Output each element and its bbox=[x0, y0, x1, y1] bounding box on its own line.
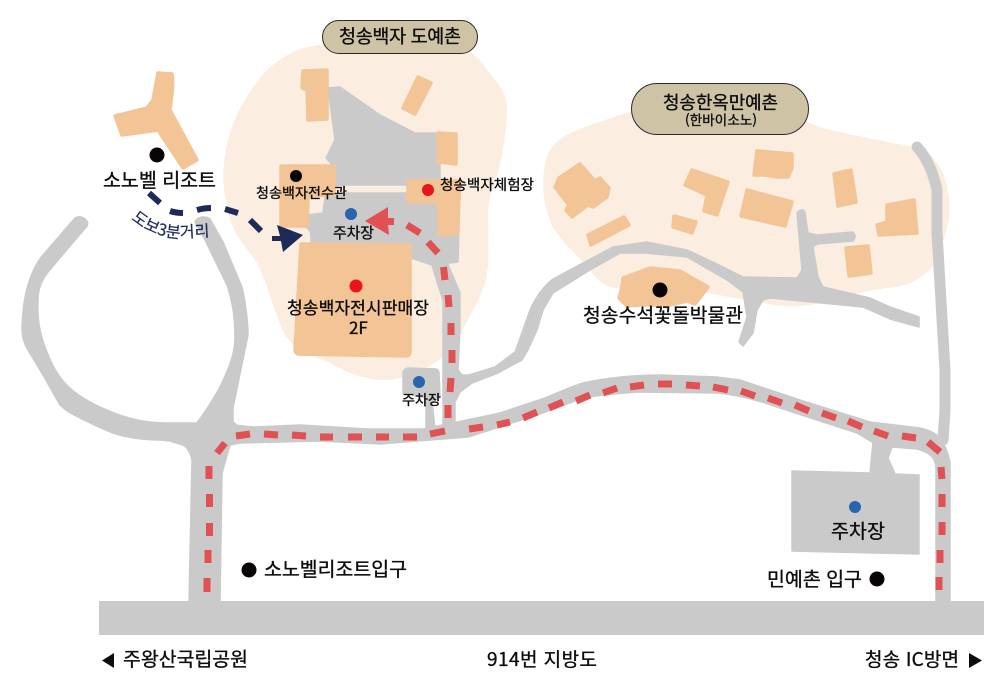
label: plaza parking: 주차장 bbox=[333, 222, 374, 243]
dot: resort entrance bbox=[242, 562, 256, 578]
building: right bbox=[438, 133, 456, 164]
label: 체험장: 청송백자체험장 bbox=[440, 174, 534, 195]
dot: 전수관 bbox=[290, 170, 302, 182]
label: museum: 청송수석꽃돌박물관 bbox=[583, 300, 743, 328]
building: hanok I bbox=[846, 246, 871, 276]
building: hanok B bbox=[588, 217, 629, 245]
route: branch to plaza bbox=[407, 225, 452, 418]
building: hanok F bbox=[741, 190, 792, 226]
label: resort entrance: 소노벨리조트입구 bbox=[264, 553, 407, 582]
route: red dashed drive bbox=[207, 207, 942, 592]
road: north-east spur bbox=[917, 147, 945, 440]
dot: south-east parking bbox=[849, 501, 861, 513]
dash 5 bbox=[250, 220, 261, 231]
dot: 전시판매장 bbox=[350, 280, 362, 292]
parking: plaza lower bbox=[305, 193, 460, 265]
dash 1 bbox=[149, 193, 160, 203]
arrow: red bbox=[365, 207, 394, 235]
route: main drive bbox=[207, 384, 942, 592]
label: 소노벨 리조트: 소노벨 리조트 bbox=[103, 164, 216, 193]
dash 4 bbox=[225, 209, 238, 213]
road: main east-west bbox=[230, 375, 950, 603]
building: hanok C bbox=[685, 170, 728, 215]
building: hanok E bbox=[754, 151, 792, 177]
building: hanok D bbox=[673, 216, 696, 233]
dash 3 bbox=[197, 208, 211, 210]
label: village entrance: 민예촌 입구 bbox=[767, 563, 862, 592]
label: 전시판매장: 청송백자전시판매장 bbox=[287, 294, 429, 319]
building: 전시판매장 bbox=[295, 244, 410, 356]
dot: 체험장 bbox=[422, 184, 434, 196]
title: 청송한옥만예촌: 청송한옥만예촌 bbox=[663, 89, 778, 115]
parking: small bbox=[403, 368, 440, 428]
building: 전수관 bbox=[281, 166, 334, 226]
label: 청송 IC방면: 청송 IC방면 bbox=[865, 645, 959, 672]
label: 전수관: 청송백자전수관 bbox=[256, 183, 347, 203]
roads bbox=[22, 87, 984, 635]
highway bbox=[99, 601, 984, 635]
parking: plaza upper bbox=[326, 87, 440, 186]
road: west loop, north link and west vertical bbox=[22, 217, 248, 603]
route: navy walking path bbox=[132, 190, 303, 252]
building: hanok G bbox=[834, 170, 856, 206]
pill: 한옥만예촌 bbox=[632, 84, 808, 134]
labels bbox=[102, 164, 982, 672]
building: hanok A bbox=[555, 164, 609, 217]
building: hanok H bbox=[877, 200, 917, 235]
title: 청송백자 도예촌: 청송백자 도예촌 bbox=[339, 23, 461, 49]
road: branch and museum loop bbox=[432, 210, 919, 425]
building: 체험장 bbox=[408, 181, 460, 234]
arrow: navy bbox=[272, 225, 303, 252]
label: walking distance: 도보3분거리 bbox=[132, 210, 208, 240]
dot: village entrance bbox=[870, 572, 884, 586]
dash 2 bbox=[170, 211, 183, 213]
label: south-east parking: 주차장 bbox=[831, 515, 885, 544]
dot: resort bbox=[150, 148, 164, 162]
parking: south-east bbox=[792, 443, 919, 554]
building: resort bbox=[115, 73, 197, 168]
area: 도예촌 bbox=[223, 40, 507, 380]
label: 914번 지방도: 914번 지방도 bbox=[487, 645, 597, 672]
area: 한옥만예촌 bbox=[543, 112, 950, 306]
icon: right triangle bbox=[969, 653, 982, 668]
buildings bbox=[115, 70, 917, 356]
icon: left triangle bbox=[102, 653, 114, 668]
pill: 도예촌 bbox=[322, 20, 478, 54]
dot: small parking bbox=[413, 376, 425, 388]
label: 주왕산국립공원: 주왕산국립공원 bbox=[123, 643, 248, 672]
dot: museum bbox=[652, 282, 668, 298]
building: museum bbox=[619, 268, 708, 306]
subtitle: 한바이소노: (한바이소노) bbox=[685, 109, 757, 129]
label: 2F: 2F bbox=[349, 314, 368, 339]
dots bbox=[150, 148, 884, 586]
building: tilted bbox=[403, 77, 431, 114]
building: top bbox=[302, 70, 327, 120]
label: small parking: 주차장 bbox=[402, 390, 441, 410]
dot: plaza parking bbox=[345, 208, 357, 220]
